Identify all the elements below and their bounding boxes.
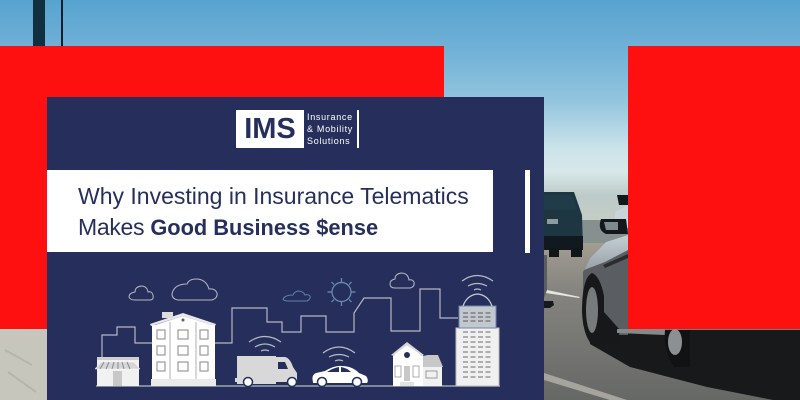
logo box with IMS: IMS	[244, 113, 296, 145]
shop building	[95, 357, 140, 386]
red block right	[628, 46, 800, 329]
cloud 3	[283, 291, 310, 301]
red block left	[0, 46, 444, 329]
tower with antenna signal	[456, 276, 499, 386]
logo	[236, 110, 359, 148]
car with signal	[312, 347, 368, 386]
icon: sun	[328, 278, 356, 306]
cloud 2	[172, 279, 217, 300]
logo tagline: & Mobility	[307, 124, 353, 134]
logo tagline: Insurance	[307, 112, 353, 122]
title text	[78, 183, 469, 240]
skyline outline	[102, 289, 458, 357]
near car	[590, 330, 800, 400]
ground line	[96, 385, 500, 387]
cloud 1	[129, 286, 153, 300]
white vertical accent bar	[525, 170, 530, 253]
city illustration	[94, 272, 500, 387]
title text: Why Investing in Insurance Telematics	[78, 183, 469, 209]
apartment building	[150, 312, 216, 386]
house	[391, 342, 443, 386]
logo tagline: Solutions	[307, 136, 350, 146]
title banner	[47, 170, 493, 252]
cloud 4	[390, 273, 414, 288]
logo tagline	[307, 112, 353, 146]
title text: Makes Good Business $ense	[78, 214, 378, 240]
logo vertical bar	[356, 110, 359, 148]
navy panel	[47, 97, 544, 400]
delivery truck with signal	[235, 336, 297, 386]
logo box with IMS	[236, 110, 304, 148]
